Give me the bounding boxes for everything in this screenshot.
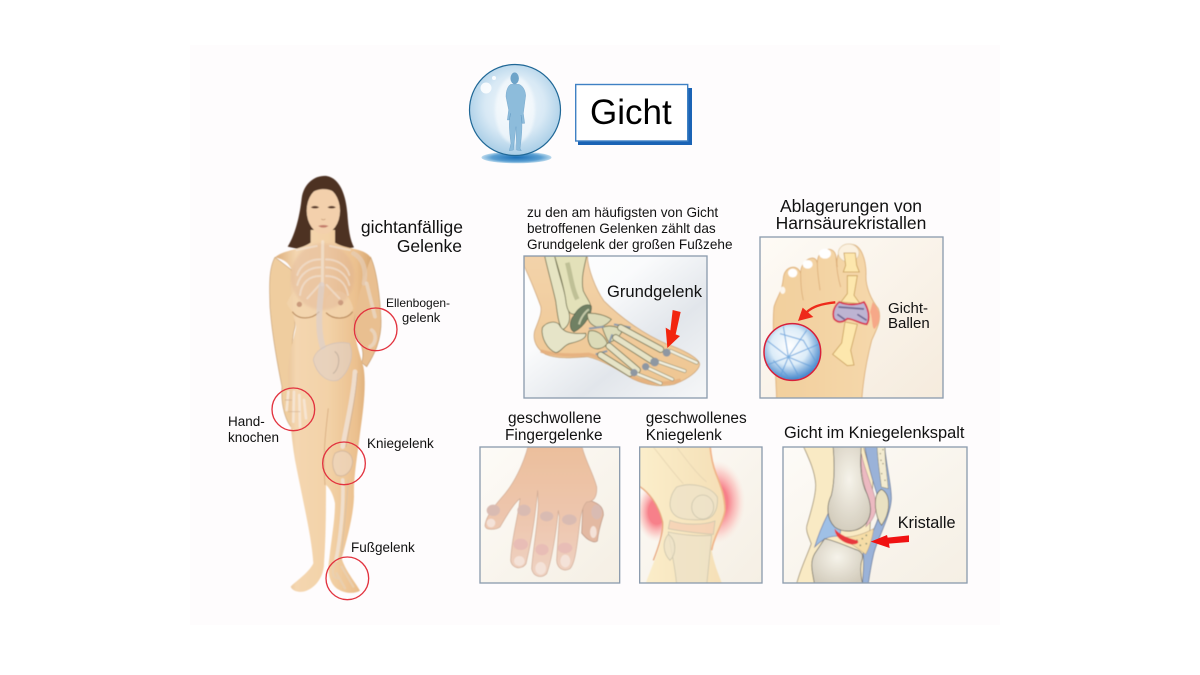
panel: gout in knee gap [783,445,967,585]
chest [287,288,353,318]
tarsal bones [587,313,611,327]
inflamed glow [714,464,742,540]
tibia [555,256,591,314]
figure: woman with skeleton overlay [270,176,397,600]
blue band [862,445,891,585]
foot shape [773,244,880,400]
toenails [788,269,797,277]
dotted strip [877,445,888,489]
metatarsals [601,328,661,373]
heading: swollen finger joints [505,410,603,444]
heading: knee gap: Gicht im Kniegelenkspalt [784,424,965,442]
circle: ankle [326,557,369,600]
joint labels: Kniegelenk [367,436,434,451]
description text: zu den am häufigsten von Gicht [527,205,718,220]
description text [527,205,733,252]
heading: swollen finger joints: Fingergelenke [505,427,603,444]
small blue figure [506,73,526,151]
tibia [812,539,863,585]
torso and legs [275,230,371,593]
joint labels: Ellenbogen- [386,296,450,310]
cartilage with crystals [846,528,874,555]
logo: globe with figure [470,64,560,163]
red arrow [871,535,909,548]
talus dark [570,305,591,332]
circle: knee [323,442,365,485]
title box shadow [578,88,692,145]
hand with fingers [485,445,597,576]
joint labels: gelenk [402,310,441,325]
heel bone [542,322,586,353]
elbow bones [367,283,375,347]
panel: swollen fingers [480,445,620,583]
patella [875,489,889,525]
figure heading: gichtanfällige [361,217,463,237]
heading: crystals: Harnsäurekristallen [776,213,926,233]
near arm and hand [270,257,309,431]
panel: foot skeleton [524,256,707,398]
label: Grundgelenk: Grundgelenk [607,282,703,301]
tibia [336,480,343,560]
foot bones [333,563,353,588]
thumb [582,497,603,542]
skin and tissue [796,445,873,585]
leg [638,445,725,585]
circle: hand [272,388,315,431]
description text: Grundgelenk der großen Fußzehe [527,237,733,252]
figure heading [361,217,463,256]
joint marker circles [272,308,397,600]
ribcage [291,243,354,310]
joint labels [228,296,450,555]
knee bones [664,485,717,585]
heading: crystals [776,196,926,233]
globe base shadow [482,152,552,163]
panel: urate crystal deposits in toe [760,237,943,400]
heading: swollen knee [646,410,747,444]
label: Kristalle: Kristalle [898,514,956,532]
title text: Gicht [590,93,672,132]
femur [828,445,871,531]
metatarsal [833,322,857,366]
joints [630,349,671,376]
femur [343,372,355,447]
circle: elbow [354,308,397,351]
heading: crystals: Ablagerungen von [780,196,922,216]
label: Gicht-Ballen: Gicht- [888,300,928,317]
heading: swollen knee: Kniegelenk [646,427,722,444]
joint labels: Hand- [228,414,265,429]
label: Gicht-Ballen: Ballen [888,315,930,332]
red arrow [666,310,681,348]
knuckle swellings [487,505,602,525]
hair [288,176,354,252]
skeleton overlay [285,242,375,588]
foot outline [524,256,700,386]
label: Gicht-Ballen [888,300,930,332]
glass sphere [470,64,560,156]
figure heading: Gelenke [397,236,462,256]
knee bones [333,451,353,476]
joint labels: Fußgelenk [351,540,415,555]
joint labels: knochen [228,430,279,445]
title box [576,84,692,145]
distal bone [843,253,859,272]
curved red arrow [807,302,835,312]
fibula [545,256,570,330]
description text: betroffenen Gelenken zählt das [527,221,716,236]
pink tissue [861,454,876,527]
shoulder bones [353,253,365,283]
blue joint tissue [815,514,841,547]
proximal bone [841,276,860,304]
crystal magnifier [764,324,821,380]
thigh line [324,408,328,485]
pelvis [313,343,351,381]
spine [318,242,327,285]
heading: swollen knee: geschwollenes [646,410,747,427]
hand bones [287,392,306,427]
toe bones [636,351,697,383]
crystal covered joint [833,302,869,324]
far arm [354,257,381,367]
crystal deposit [835,529,858,544]
face [307,187,340,234]
heading: swollen finger joints: geschwollene [508,410,601,427]
panel: swollen knee [636,445,762,585]
